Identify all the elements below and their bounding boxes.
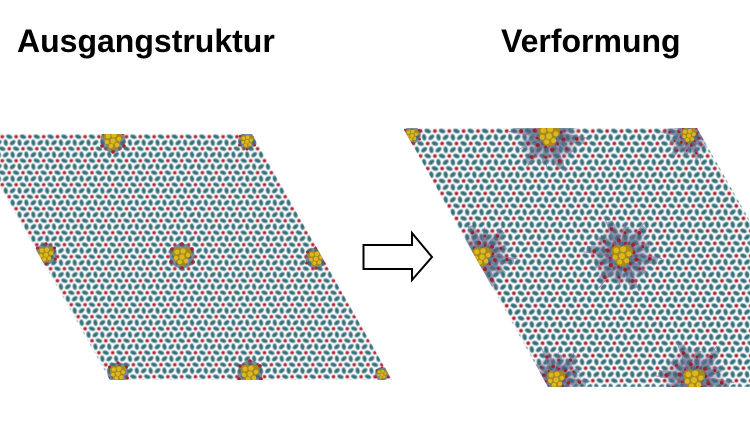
defect: bottom right [375,366,389,382]
panel: initial lattice structure [0,126,392,387]
defect: centre [169,242,195,270]
defect: top right with strain field [661,128,708,161]
lattice: regular atoms [403,128,750,387]
defect: bottom middle [237,359,263,380]
title: Ausgangstruktur: Ausgangstruktur [17,23,275,59]
panel: deformed lattice structure [404,128,750,387]
title: Verformung: Verformung [501,23,681,59]
defect: top right [238,134,256,151]
defect: top left [100,134,126,154]
arrow [364,233,432,280]
lattice: regular atoms [0,134,392,380]
defect: centre with strain field [582,216,662,294]
defect: left edge with strain field [464,223,518,289]
defect: bottom right with strain field [654,342,734,387]
defect: bottom left with strain field [535,348,590,387]
defect: left edge [35,242,57,266]
defect: bottom left [107,361,129,380]
defect: top left corner [404,128,421,144]
defect: right edge [305,246,327,270]
defect: top middle with strain field [509,128,589,172]
